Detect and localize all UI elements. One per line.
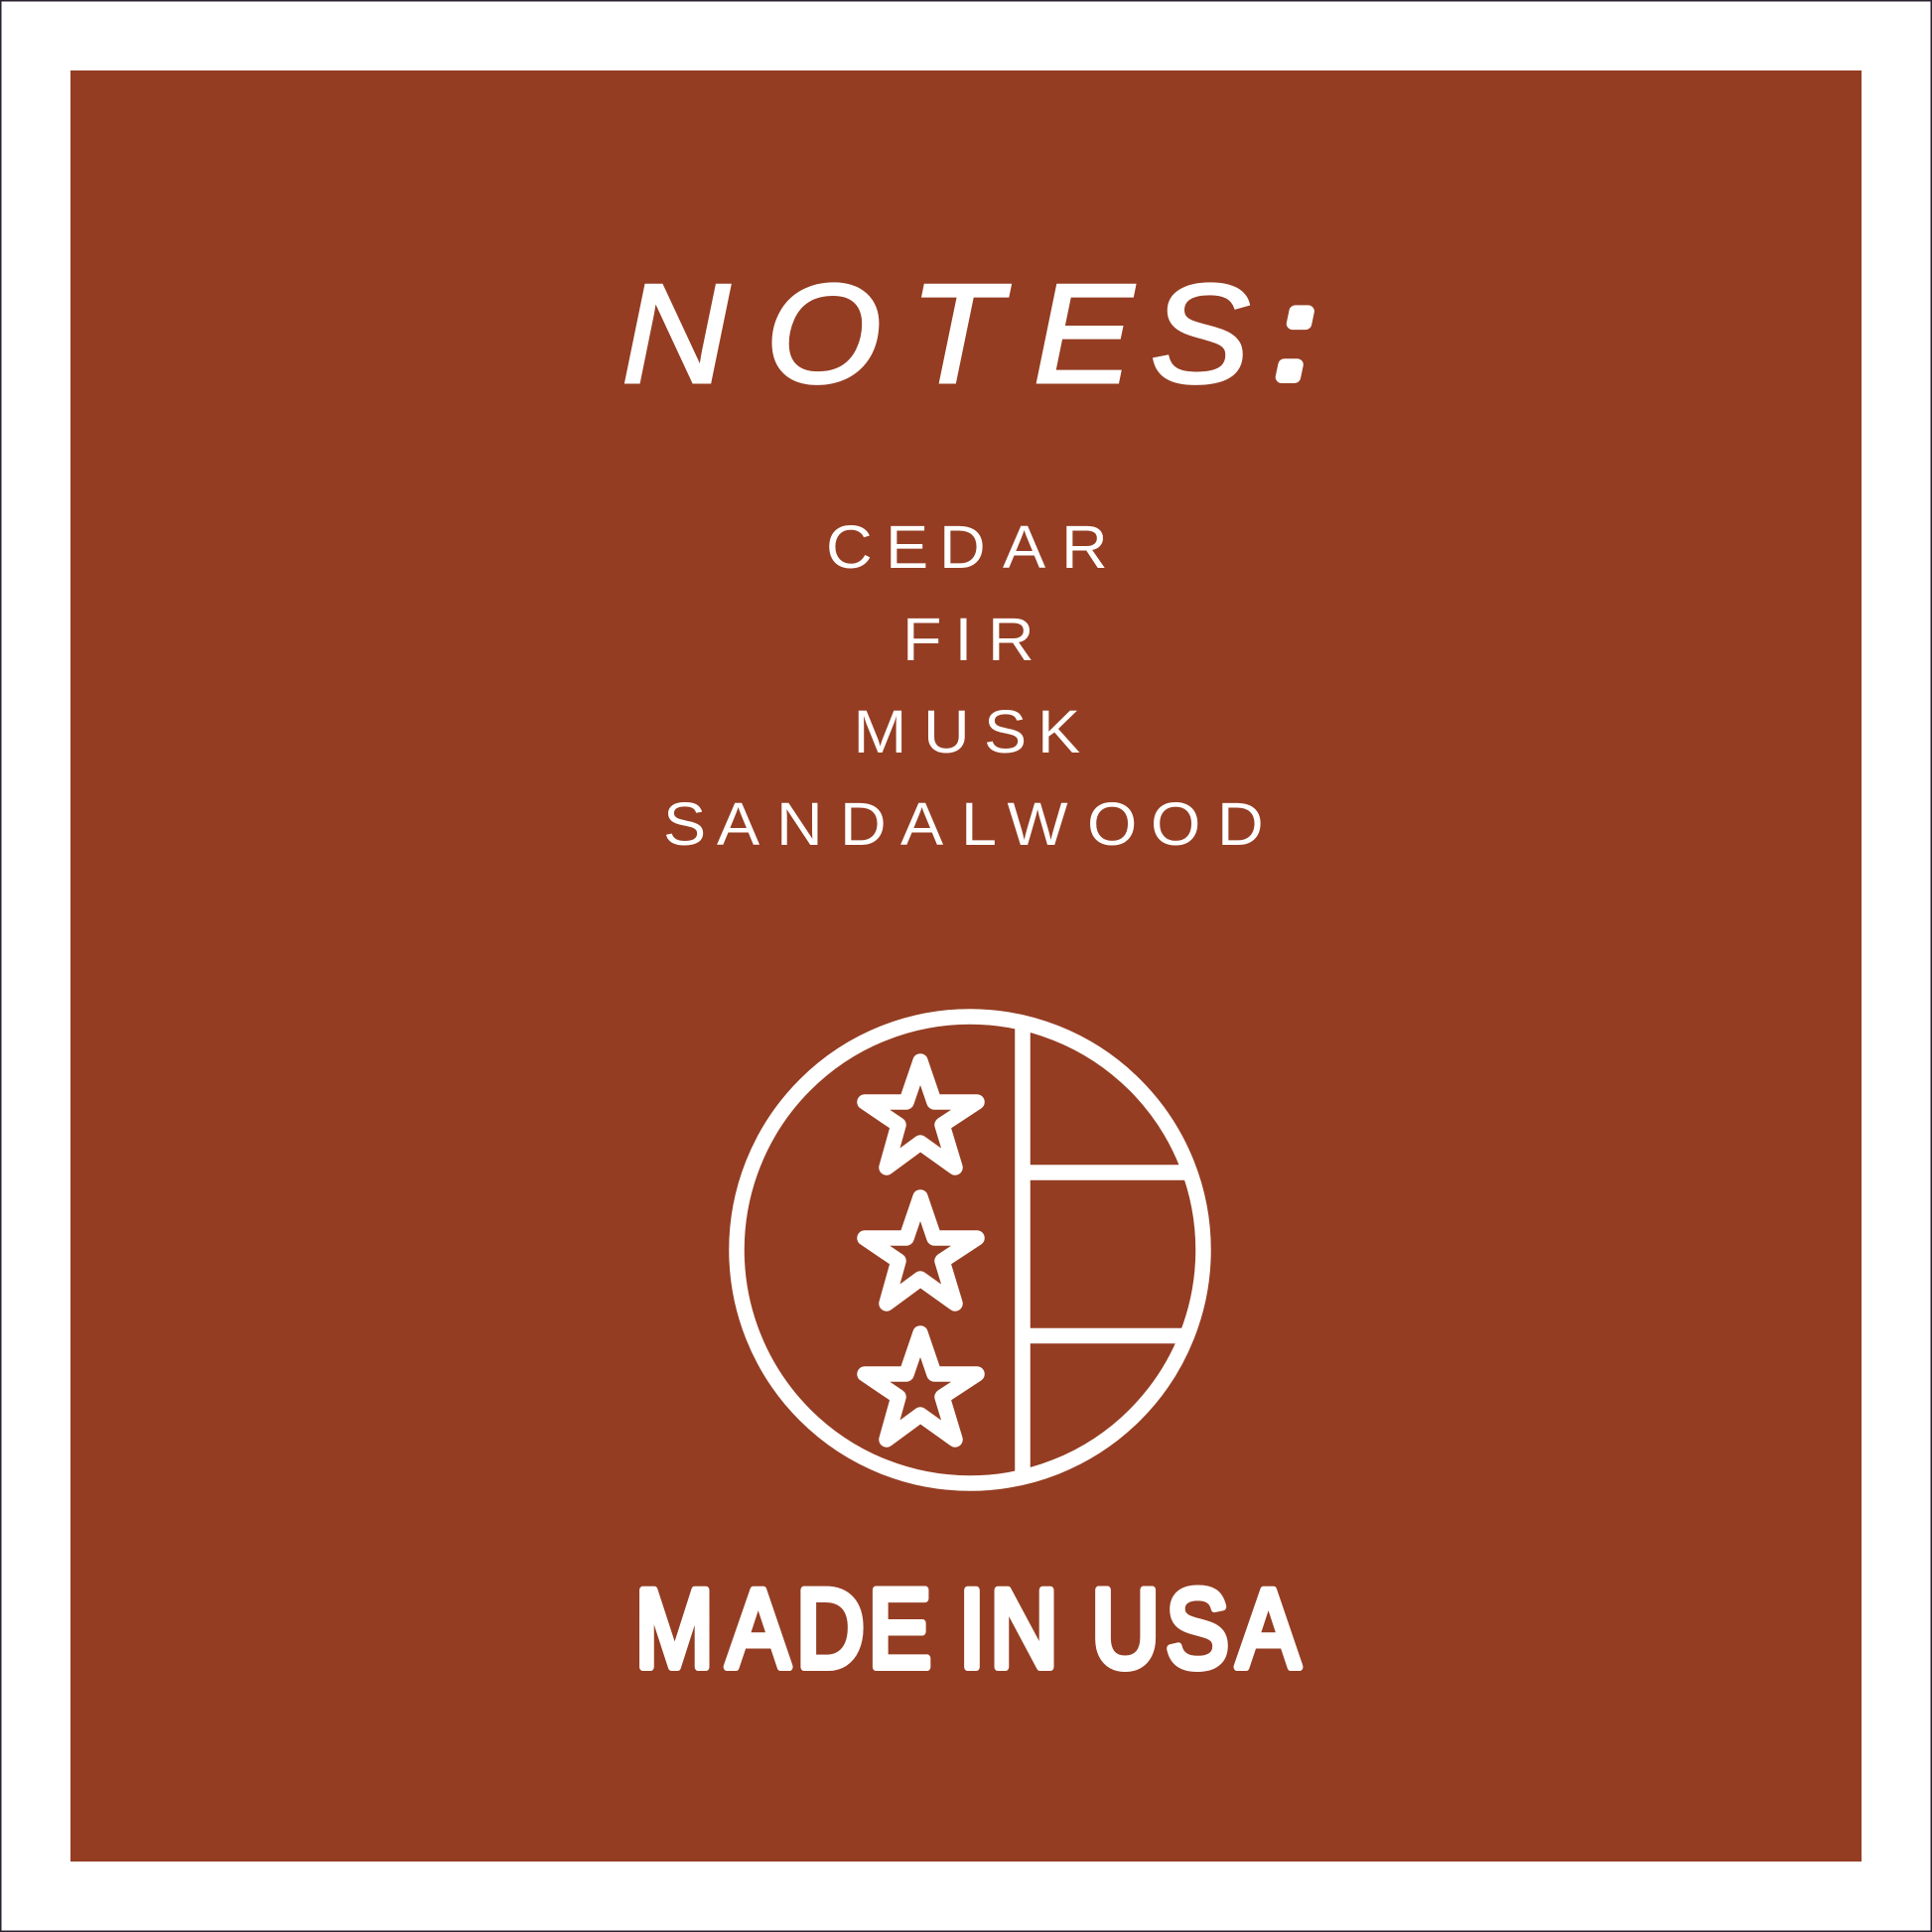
star 1 xyxy=(865,1061,977,1168)
label: made in USA: MADE IN USA xyxy=(635,1568,1301,1692)
note: cedar: CEDAR xyxy=(826,514,1108,582)
note: sandalwood: SANDALWOOD xyxy=(663,791,1264,859)
star 3 xyxy=(865,1333,977,1440)
upper stripe line xyxy=(1023,1165,1191,1180)
lower stripe line xyxy=(1023,1328,1187,1343)
list of scent notes xyxy=(663,514,1264,859)
title: NOTES: NOTES xyxy=(621,256,1250,413)
icon: circle with stars and stripes flag xyxy=(737,1017,1203,1483)
flag pole divider xyxy=(1015,1023,1031,1477)
title: NOTES: : xyxy=(1277,263,1313,404)
icon ring xyxy=(737,1017,1203,1483)
note: musk: MUSK xyxy=(853,699,1080,766)
star 2 xyxy=(865,1197,977,1304)
note: fir: FIR xyxy=(902,607,1035,674)
